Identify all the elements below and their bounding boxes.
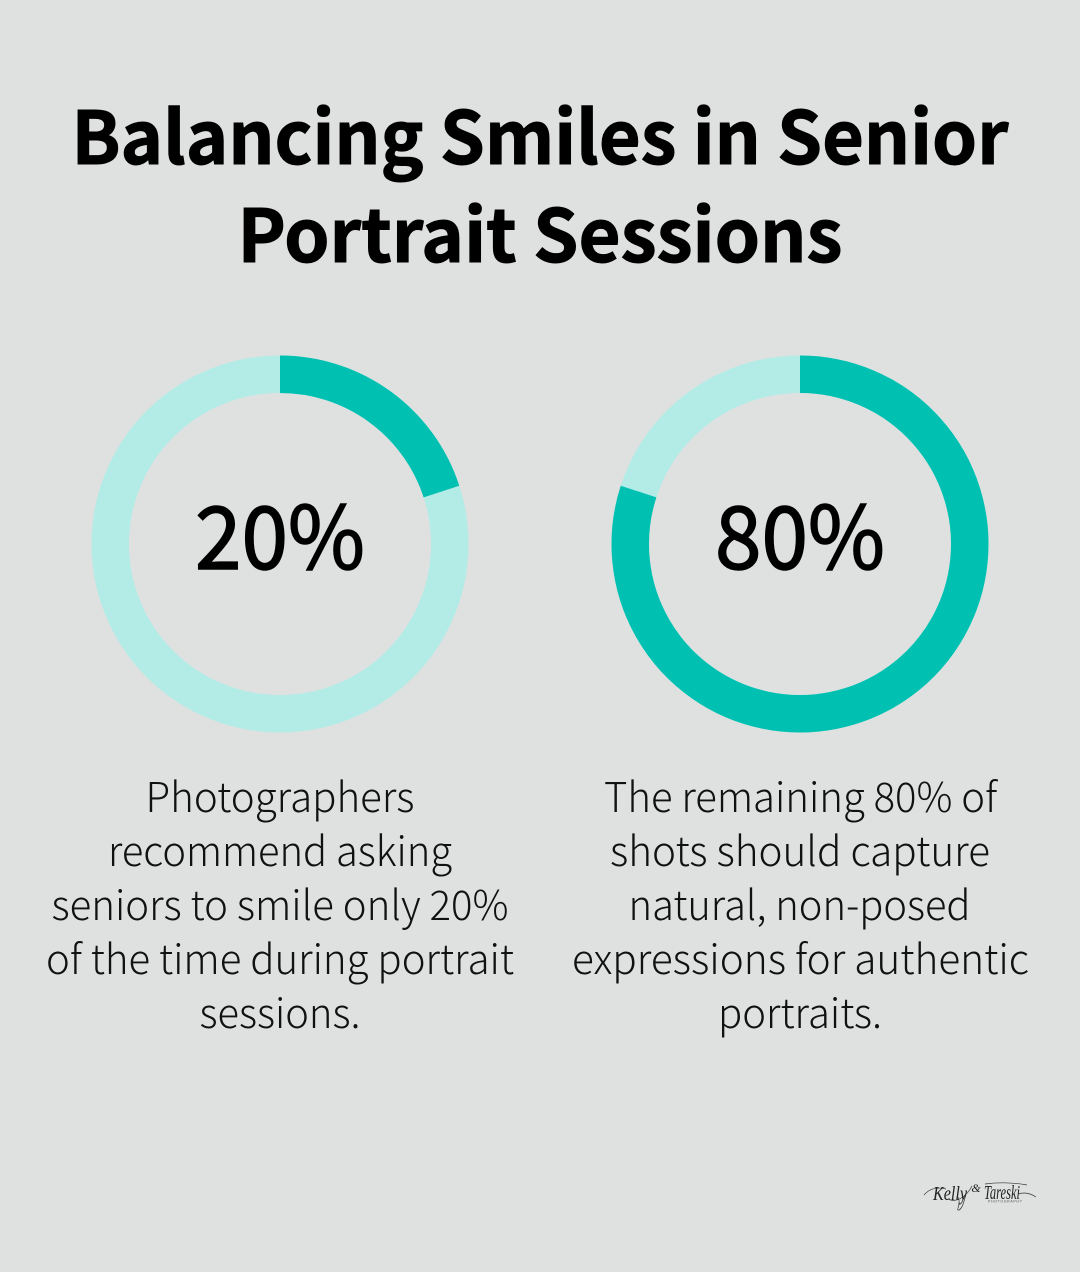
description: 20%: sessions. xyxy=(200,980,360,1040)
description: 20%: recommend asking xyxy=(108,818,452,878)
description: 80%: shots should capture xyxy=(610,818,990,878)
description: 20%: of the time during portrait xyxy=(46,926,514,986)
donut chart: 20% xyxy=(110,374,450,714)
description: 20% xyxy=(46,764,514,1040)
panel: 20% smiling xyxy=(46,374,514,1040)
description: 80% xyxy=(572,764,1029,1040)
logo: Kelly & Tareski Photography: PHOTOGRAPHY xyxy=(988,1200,1023,1204)
description: 80%: The remaining 80% of xyxy=(604,764,999,824)
description: 80%: portraits. xyxy=(718,980,882,1040)
title: Balancing Smiles in Senior xyxy=(72,80,1009,186)
logo: Kelly & Tareski Photography xyxy=(924,1181,1036,1210)
logo: Kelly & Tareski Photography: Tareski xyxy=(984,1182,1020,1204)
logo: Kelly & Tareski Photography: & xyxy=(971,1181,981,1195)
donut chart: 80%: 80% xyxy=(715,469,885,595)
panel: 80% natural xyxy=(572,374,1029,1040)
description: 20%: Photographers xyxy=(146,764,414,824)
donut chart: 80% xyxy=(630,374,970,714)
description: 80%: natural, non-posed xyxy=(628,872,970,932)
description: 20%: seniors to smile only 20% xyxy=(52,872,508,932)
title: Portrait Sessions xyxy=(238,178,842,284)
donut chart: 20%: 20% xyxy=(195,469,365,595)
title xyxy=(72,80,1009,284)
logo: Kelly & Tareski Photography: Kelly xyxy=(932,1183,967,1205)
description: 80%: expressions for authentic xyxy=(572,926,1029,986)
